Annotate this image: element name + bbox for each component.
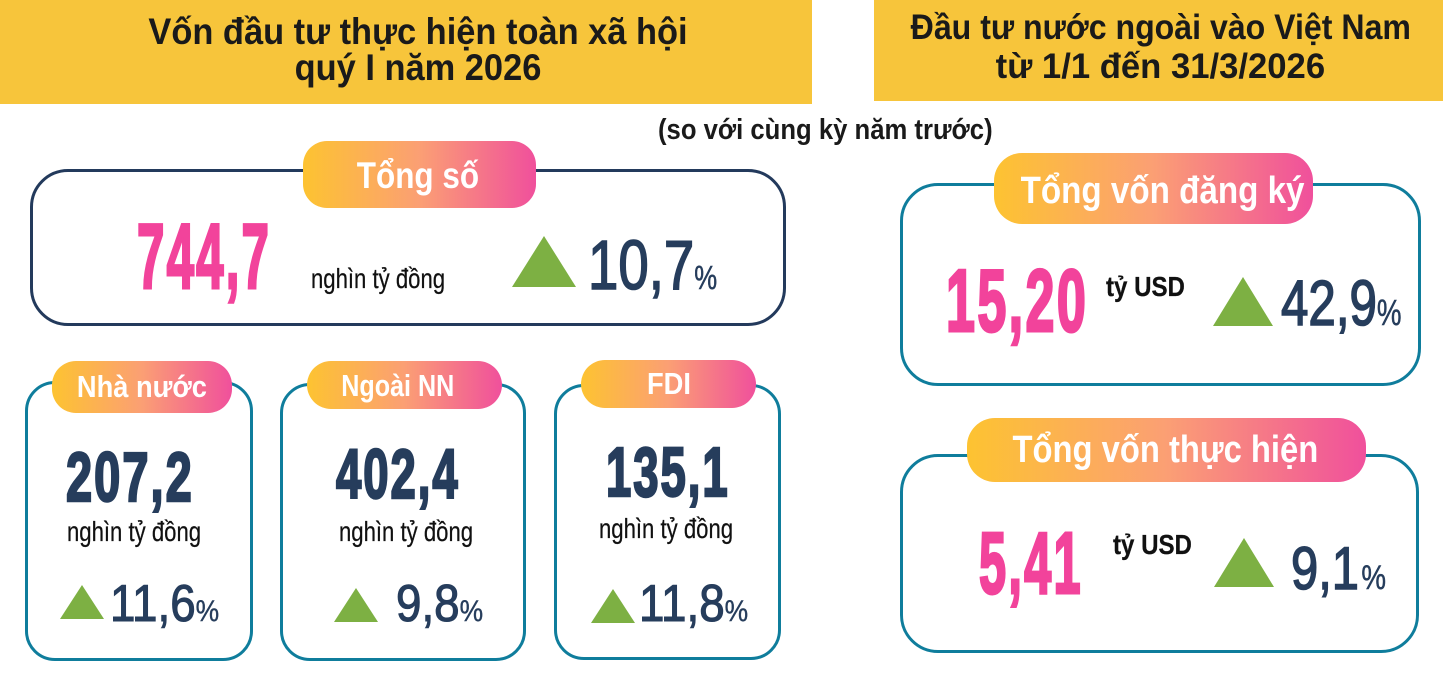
value: registered: 15,20 [946,251,1088,350]
change: state: 11,6% [110,575,219,633]
header: domestic investment [0,0,812,104]
pill: FDI: FDI [647,366,690,401]
unit: disbursed: tỷ USD [1113,529,1192,560]
panel: FDI [554,384,781,660]
pill: state [52,361,232,413]
unit: private: nghìn tỷ đồng [339,516,473,547]
pill: private: Ngoài NN [341,368,454,403]
heading text: Vốn đầu tư thực hiện toàn xã hội [148,11,688,52]
pill: disbursed capital [967,418,1366,482]
pill: private [307,361,502,409]
change: disbursed: 9,1% [1291,535,1386,602]
icon: up triangle [1214,538,1274,587]
value: FDI: 135,1 [606,433,730,511]
heading text: từ 1/1 đến 31/3/2026 [996,47,1325,86]
pill: FDI [581,360,756,408]
comparison note: (so với cùng kỳ năm trước) [658,114,993,146]
pill: total [303,141,536,208]
heading text: quý I năm 2026 [295,47,541,88]
header: foreign investment [874,0,1443,101]
value: state: 207,2 [66,438,194,516]
pill: disbursed capital: Tổng vốn thực hiện [1013,429,1318,471]
heading text [910,8,1411,86]
unit: registered: tỷ USD [1106,271,1185,302]
heading text: Đầu tư nước ngoài vào Việt Nam [910,8,1411,47]
icon: up triangle [512,236,576,287]
panel: registered capital [900,183,1421,386]
pill: state: Nhà nước [77,369,207,404]
icon: up triangle [1213,277,1273,326]
change: FDI: 11,8% [639,575,748,633]
icon: up triangle [60,585,104,619]
unit: state: nghìn tỷ đồng [67,516,201,547]
pill: total: Tổng số [356,155,479,196]
pill: registered capital [994,153,1313,224]
pill: registered capital: Tổng vốn đăng ký [1021,170,1304,212]
icon: up triangle [591,589,635,623]
icon: up triangle [334,588,378,622]
unit: FDI: nghìn tỷ đồng [599,513,733,544]
panel: private [280,383,526,661]
heading text [148,11,688,88]
panel: disbursed capital [900,454,1419,653]
panel: state [25,381,253,661]
unit: total: nghìn tỷ đồng [311,263,445,294]
change: total: 10,7% [588,226,717,304]
change: private: 9,8% [396,575,483,633]
change: registered: 42,9% [1281,267,1402,339]
value: private: 402,4 [336,435,460,513]
panel: total [30,169,786,326]
value: total: 744,7 [137,206,271,308]
value: disbursed: 5,41 [979,515,1083,612]
